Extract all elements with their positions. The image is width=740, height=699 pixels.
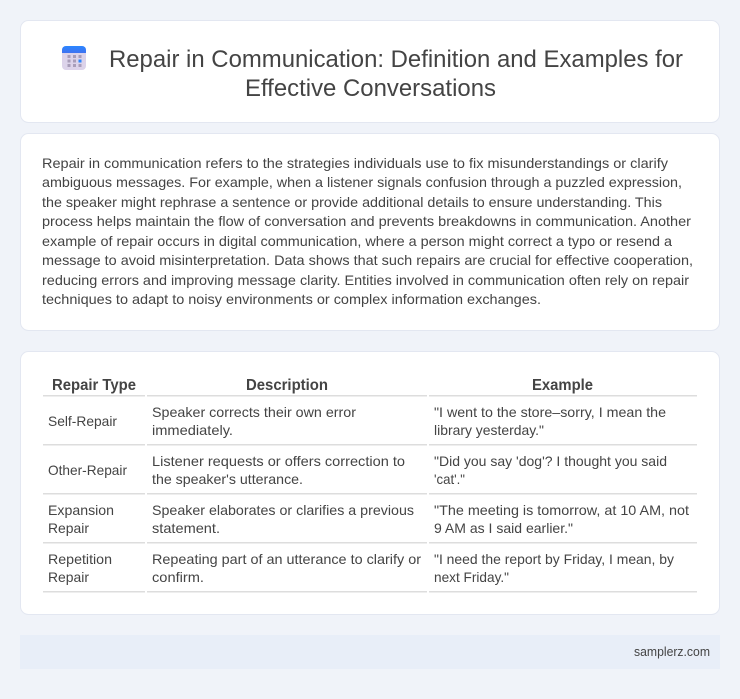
table header row: Example <box>532 377 593 394</box>
table header row <box>43 377 697 396</box>
title: Repair in Communication: Definition and Examples for <box>109 46 683 73</box>
icon: calendar <box>62 46 86 70</box>
title <box>109 46 683 102</box>
text block: definition paragraph: message to avoid misinterpretation. Data shows that such repairs are crucial for effective cooperation, <box>42 252 693 268</box>
table row: Other-Repair: the speaker's utterance. <box>152 471 303 487</box>
text block: definition paragraph: ambiguous messages. For example, when a listener signals confusion through a puzzled expression, <box>42 174 682 190</box>
text block: definition paragraph: process helps maintain the flow of conversation and prevents breakdowns in communication. Another <box>42 213 691 229</box>
table row: Other-Repair: "Did you say 'dog'? I thought you said <box>434 453 667 469</box>
table row: Other-Repair: 'cat'." <box>434 471 465 487</box>
table row: Repetition Repair <box>43 551 697 592</box>
text block: definition paragraph: the speaker might rephrase a sentence or provide additional details to ensure understanding. This <box>42 194 662 210</box>
table row: Expansion Repair: statement. <box>152 520 220 536</box>
table row: Repetition Repair: next Friday." <box>434 569 509 585</box>
panel: repair types table <box>20 352 720 614</box>
text block: definition paragraph: reducing errors and improving message clarity. Entities involved in communication often rely on repair <box>42 272 689 288</box>
panel: definition text <box>20 134 720 330</box>
table row: Self-Repair: Speaker corrects their own error <box>152 404 356 420</box>
table row: Expansion Repair <box>43 502 697 544</box>
text block: definition paragraph: example of repair occurs in digital communication, where a person might correct a typo or resend a <box>42 233 672 249</box>
table row: Other-Repair: Other-Repair <box>48 462 127 478</box>
table row: Self-Repair: "I went to the store–sorry, I mean the <box>434 404 666 420</box>
text block: definition paragraph: Repair in communication refers to the strategies individuals use to fix misunderstandings or clarify <box>42 155 668 171</box>
footer text: source: samplerz.com <box>634 645 710 659</box>
table row: Repetition Repair: Repetition <box>48 551 112 567</box>
panel: title header <box>20 20 720 122</box>
text block: definition paragraph <box>42 155 693 307</box>
table row: Repetition Repair: Repeating part of an utterance to clarify or <box>152 551 421 567</box>
table header row: Repair Type <box>52 377 136 394</box>
table row: Other-Repair <box>43 453 697 494</box>
table row: Self-Repair: Self-Repair <box>48 413 117 429</box>
table row: Self-Repair: library yesterday." <box>434 422 544 438</box>
table row: Repetition Repair: confirm. <box>152 569 204 585</box>
footer bar <box>20 635 720 669</box>
table row: Other-Repair: Listener requests or offers correction to <box>152 453 405 469</box>
table row: Repetition Repair: Repair <box>48 569 89 585</box>
text block: definition paragraph: techniques to adapt to noisy environments or complex information exchanges. <box>42 291 541 307</box>
table row: Expansion Repair: 9 AM as I said earlier." <box>434 520 573 536</box>
table row: Self-Repair <box>43 404 697 446</box>
table row: Expansion Repair: Expansion <box>48 502 114 518</box>
table row: Self-Repair: immediately. <box>152 422 233 438</box>
table header row: Description <box>246 377 328 394</box>
table row: Repetition Repair: "I need the report by Friday, I mean, by <box>434 551 674 567</box>
title: Effective Conversations <box>245 75 496 102</box>
table row: Expansion Repair: Speaker elaborates or clarifies a previous <box>152 502 414 518</box>
table row: Expansion Repair: "The meeting is tomorrow, at 10 AM, not <box>434 502 689 518</box>
table row: Expansion Repair: Repair <box>48 520 89 536</box>
